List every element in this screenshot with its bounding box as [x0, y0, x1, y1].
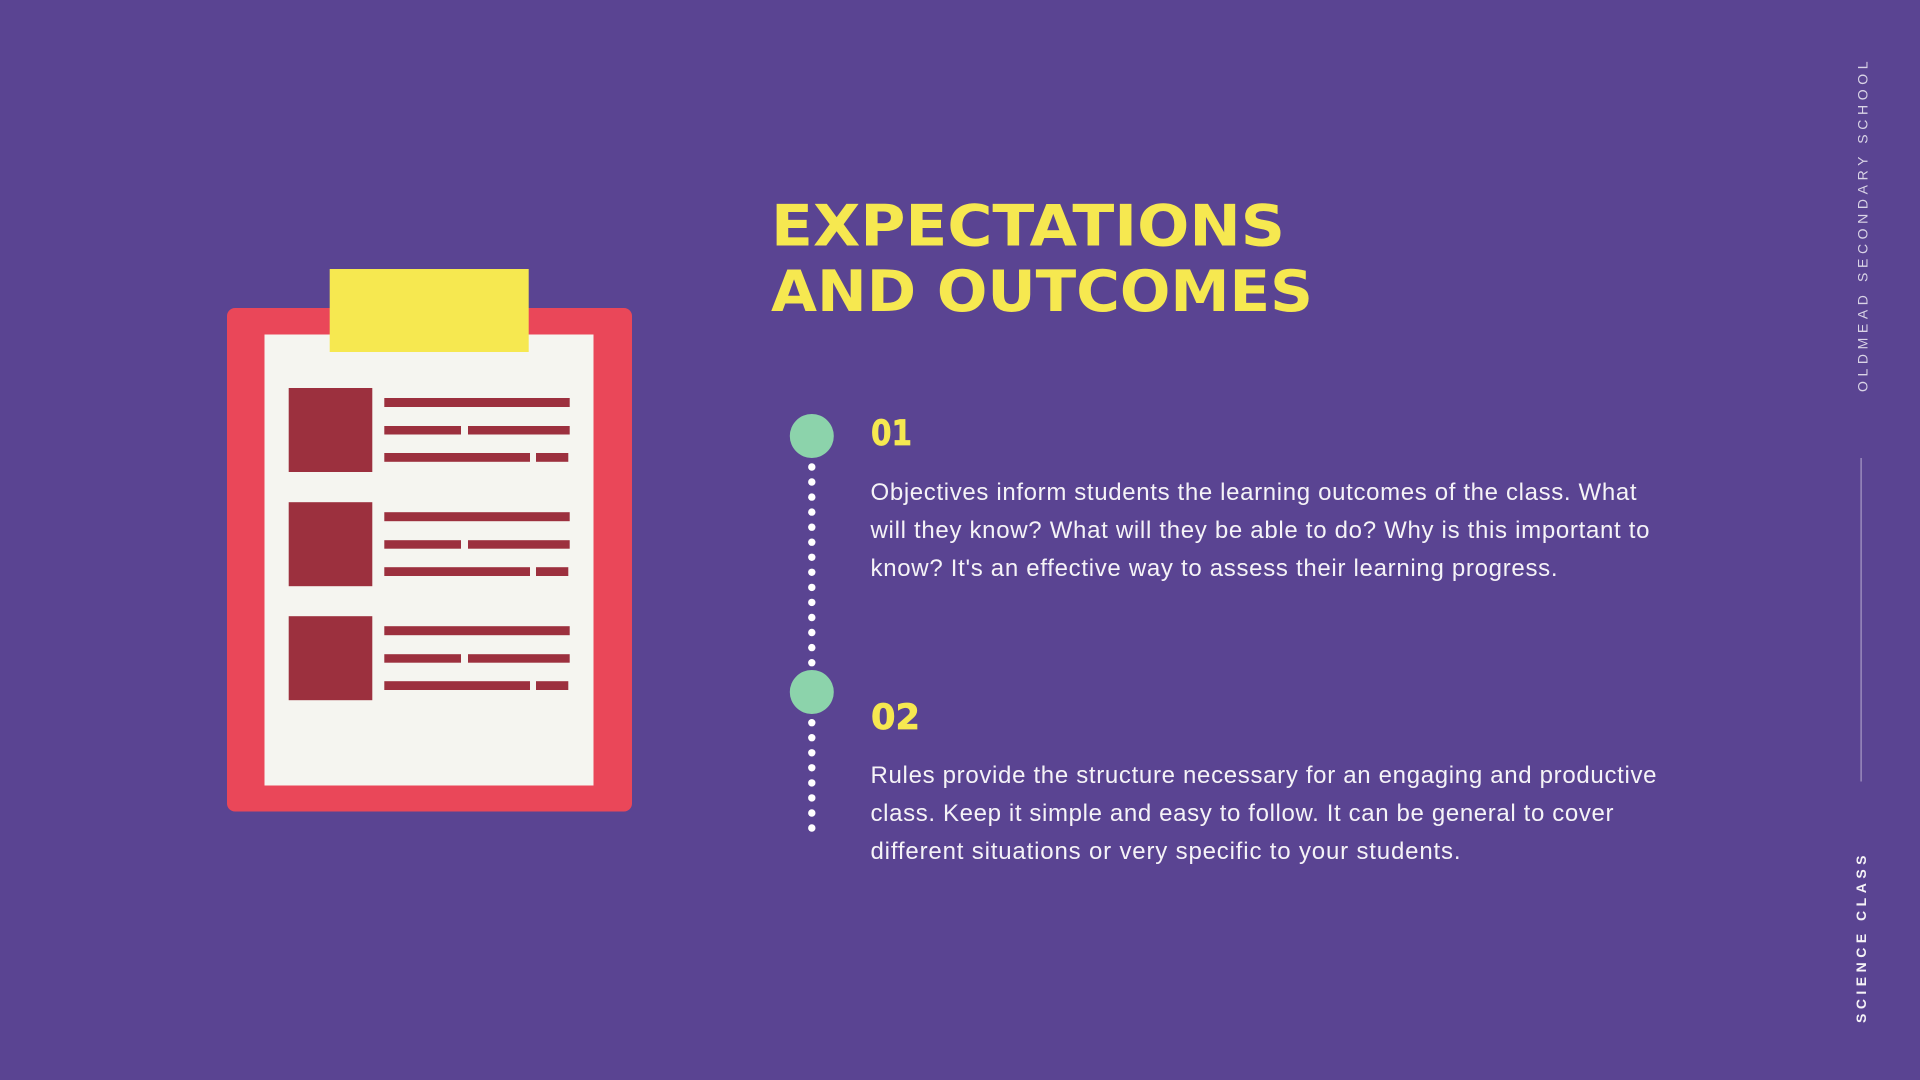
title: AND OUTCOMES [771, 259, 1313, 325]
sidebar divider [1860, 458, 1862, 782]
clipboard paper [264, 334, 594, 786]
dotted connector 2 [808, 719, 816, 832]
timeline marker 2 [790, 670, 834, 714]
objectives paragraph: will they know? What will they be able to do? Why is this important to [870, 517, 1650, 544]
clipboard board [227, 308, 632, 812]
rules paragraph: class. Keep it simple and easy to follow. It can be general to cover [870, 800, 1614, 827]
rules paragraph [870, 762, 1656, 865]
objectives paragraph [870, 479, 1650, 582]
checklist row 3 [289, 616, 570, 700]
dotted connector 1 [808, 463, 816, 666]
objectives paragraph: Objectives inform students the learning outcomes of the class. What [870, 479, 1637, 506]
icon: clipboard [227, 269, 632, 812]
objectives paragraph: know? It's an effective way to assess their learning progress. [870, 555, 1558, 582]
timeline marker 1 [790, 414, 834, 458]
checklist row 2 [289, 502, 570, 586]
sidebar school name: OLDMEAD SECONDARY SCHOOL [1854, 61, 1870, 392]
number 02: 02 [871, 698, 920, 738]
rules paragraph: different situations or very specific to your students. [870, 838, 1460, 865]
title [771, 194, 1313, 325]
clipboard clip [330, 269, 529, 352]
checklist row 1 [289, 388, 570, 472]
sidebar class name: SCIENCE CLASS [1853, 856, 1869, 1023]
rules paragraph: Rules provide the structure necessary for an engaging and productive [870, 762, 1656, 789]
title: EXPECTATIONS [771, 194, 1285, 260]
number 01: 01 [871, 414, 912, 454]
